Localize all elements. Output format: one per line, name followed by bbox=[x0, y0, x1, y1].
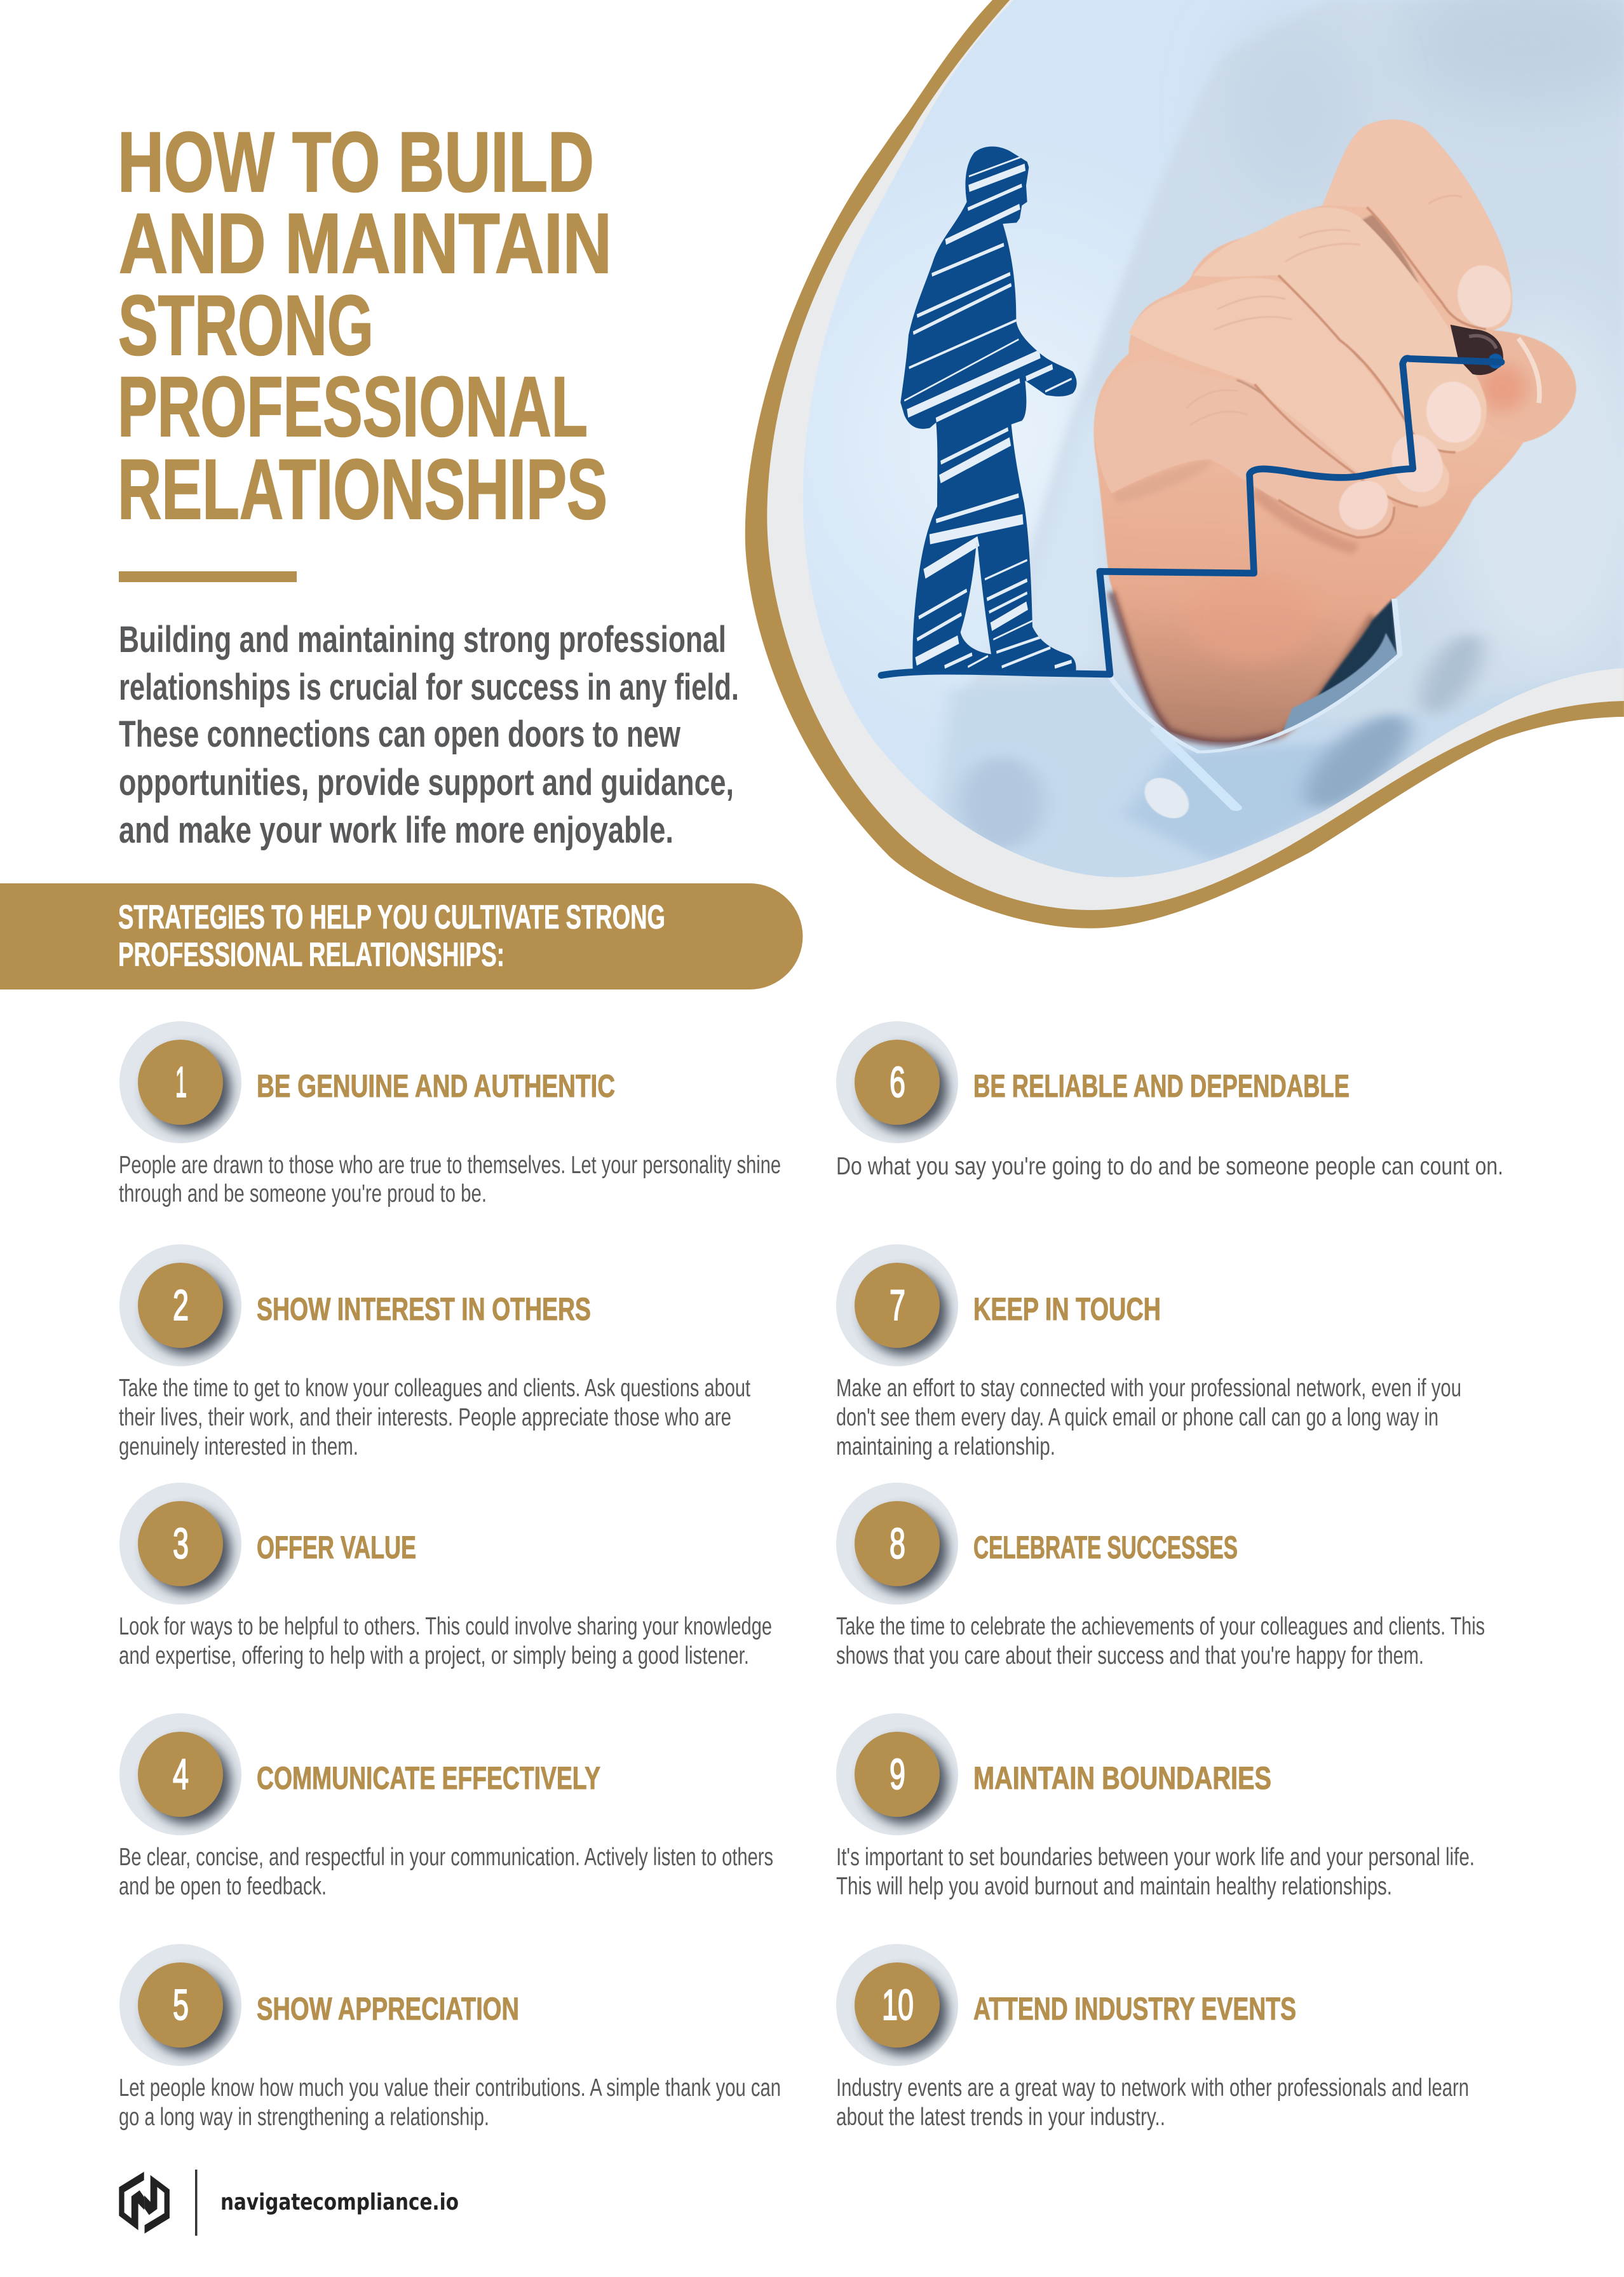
intro paragraph: and make your work life more enjoyable. bbox=[119, 810, 673, 851]
shadow under little finger bbox=[1251, 486, 1360, 554]
hero photo blob bbox=[718, 0, 1624, 953]
heading 2: SHOW INTEREST IN OTHERS bbox=[257, 1291, 591, 1327]
body 1: through and be someone you're proud to be. bbox=[119, 1180, 487, 1207]
number 6: 6 bbox=[890, 1058, 905, 1106]
heading 6: BE RELIABLE AND DEPENDABLE bbox=[973, 1068, 1350, 1104]
body 10 bbox=[836, 2074, 1469, 2131]
heading 7: KEEP IN TOUCH bbox=[973, 1291, 1161, 1327]
knuckle creases bbox=[1187, 196, 1462, 425]
palm and wrist bbox=[1094, 119, 1576, 742]
index finger bbox=[1323, 119, 1512, 329]
intro paragraph: relationships is crucial for success in any field. bbox=[119, 667, 739, 708]
item 1: 1 bbox=[175, 1058, 187, 1106]
badge 7 bbox=[836, 1244, 958, 1366]
title: RELATIONSHIPS bbox=[118, 442, 607, 537]
thumb bbox=[1493, 330, 1576, 442]
body 8: shows that you care about their success and that you're happy for them. bbox=[836, 1642, 1424, 1669]
item 1 bbox=[119, 1021, 781, 1207]
heading 5: SHOW APPRECIATION bbox=[257, 1991, 519, 2027]
shirt lower bbox=[937, 631, 1624, 913]
body 4: and be open to feedback. bbox=[119, 1873, 327, 1900]
body 5: go a long way in strengthening a relationship. bbox=[119, 2104, 489, 2131]
title: HOW TO BUILD bbox=[118, 115, 594, 210]
body 2: genuinely interested in them. bbox=[119, 1433, 358, 1460]
grey inner band bbox=[767, 0, 1624, 910]
gap shadows bbox=[1362, 214, 1418, 283]
gold outer curve bbox=[745, 0, 1624, 928]
item 10 bbox=[836, 1944, 1469, 2131]
shirt cuff bbox=[1109, 599, 1400, 820]
shirt upper bbox=[976, 0, 1624, 718]
body 5: Let people know how much you value their contributions. A simple thank you can bbox=[119, 2074, 781, 2102]
body 9: This will help you avoid burnout and maintain healthy relationships. bbox=[836, 1873, 1392, 1900]
intro paragraph bbox=[119, 619, 739, 851]
body 1 bbox=[119, 1152, 781, 1207]
strategies banner: PROFESSIONAL RELATIONSHIPS: bbox=[118, 936, 504, 974]
body 5 bbox=[119, 2074, 781, 2131]
heading 8: CELEBRATE SUCCESSES bbox=[973, 1530, 1238, 1565]
item 6 bbox=[836, 1021, 1503, 1180]
number 4: 4 bbox=[173, 1750, 189, 1798]
title: PROFESSIONAL bbox=[118, 360, 588, 454]
body 8 bbox=[836, 1613, 1485, 1669]
stairs line bbox=[881, 358, 1501, 676]
intro paragraph: Building and maintaining strong professional bbox=[119, 619, 726, 660]
badge 1 bbox=[119, 1021, 241, 1143]
badge 2 bbox=[119, 1244, 241, 1366]
badge 3 bbox=[119, 1483, 241, 1605]
body 2: their lives, their work, and their interests. People appreciate those who are bbox=[119, 1404, 731, 1431]
hand bbox=[1094, 119, 1576, 742]
fingernails bbox=[1452, 261, 1517, 332]
heading 4: COMMUNICATE EFFECTIVELY bbox=[257, 1760, 600, 1796]
strategies banner: STRATEGIES TO HELP YOU CULTIVATE STRONG bbox=[118, 899, 665, 936]
walking man figure bbox=[900, 146, 1077, 670]
body 7: maintaining a relationship. bbox=[836, 1433, 1055, 1460]
item 5 bbox=[119, 1944, 781, 2131]
title rule bbox=[119, 571, 297, 582]
body 3: and expertise, offering to help with a project, or simply being a good listener. bbox=[119, 1642, 749, 1669]
title: AND MAINTAIN bbox=[119, 196, 612, 291]
finger edges bbox=[1255, 207, 1486, 538]
number 8: 8 bbox=[890, 1519, 905, 1568]
item 7 bbox=[836, 1244, 1461, 1460]
footer logo bbox=[119, 2170, 459, 2236]
body 4: Be clear, concise, and respectful in your communication. Actively listen to others bbox=[119, 1844, 773, 1871]
number 10: 10 bbox=[882, 1981, 914, 2029]
logo divider bbox=[195, 2170, 197, 2236]
body 9 bbox=[836, 1844, 1475, 1900]
photo: hand drawing stairs bbox=[803, 0, 1624, 877]
item 2 bbox=[119, 1244, 750, 1460]
website: navigatecompliance.io bbox=[220, 2189, 459, 2215]
middle finger bbox=[1193, 208, 1487, 452]
strategies banner bbox=[0, 883, 803, 989]
heading 1: BE GENUINE AND AUTHENTIC bbox=[257, 1068, 615, 1104]
heading 10: ATTEND INDUSTRY EVENTS bbox=[973, 1991, 1296, 2027]
little finger bbox=[1095, 381, 1394, 536]
body 10: about the latest trends in your industry.. bbox=[836, 2104, 1165, 2131]
shirt button bbox=[1137, 775, 1196, 820]
title: STRONG bbox=[118, 278, 374, 373]
intro paragraph: These connections can open doors to new bbox=[119, 714, 681, 755]
heading 9: MAINTAIN BOUNDARIES bbox=[973, 1760, 1271, 1796]
badge 6 bbox=[836, 1021, 958, 1143]
heading 3: OFFER VALUE bbox=[257, 1530, 416, 1565]
title bbox=[118, 115, 612, 537]
body 2 bbox=[119, 1375, 750, 1460]
ring finger bbox=[1128, 278, 1449, 506]
body 2: Take the time to get to know your colleagues and clients. Ask questions about bbox=[119, 1375, 750, 1402]
badge 9 bbox=[836, 1713, 958, 1835]
body 3: Look for ways to be helpful to others. This could involve sharing your knowledge bbox=[119, 1613, 772, 1640]
item 9 bbox=[836, 1713, 1475, 1900]
badge 5 bbox=[119, 1944, 241, 2066]
pen bbox=[881, 325, 1503, 676]
badge 8 bbox=[836, 1483, 958, 1605]
badge 10 bbox=[836, 1944, 958, 2066]
body 1: People are drawn to those who are true to themselves. Let your personality shine bbox=[119, 1152, 781, 1179]
body 7 bbox=[836, 1375, 1461, 1460]
item 8 bbox=[836, 1483, 1485, 1669]
number 2: 2 bbox=[173, 1281, 189, 1329]
item 3 bbox=[119, 1483, 772, 1669]
body 4 bbox=[119, 1844, 773, 1900]
number 3: 3 bbox=[173, 1519, 189, 1568]
number 5: 5 bbox=[173, 1981, 189, 2029]
body 3 bbox=[119, 1613, 772, 1669]
badge 4 bbox=[119, 1713, 241, 1835]
number 9: 9 bbox=[890, 1750, 905, 1798]
number 7: 7 bbox=[890, 1281, 905, 1329]
wrist shading bbox=[1111, 592, 1278, 742]
intro paragraph: opportunities, provide support and guidance, bbox=[119, 762, 734, 803]
icon: navigate compliance hexagon bbox=[119, 2172, 170, 2234]
item 4 bbox=[119, 1713, 773, 1900]
